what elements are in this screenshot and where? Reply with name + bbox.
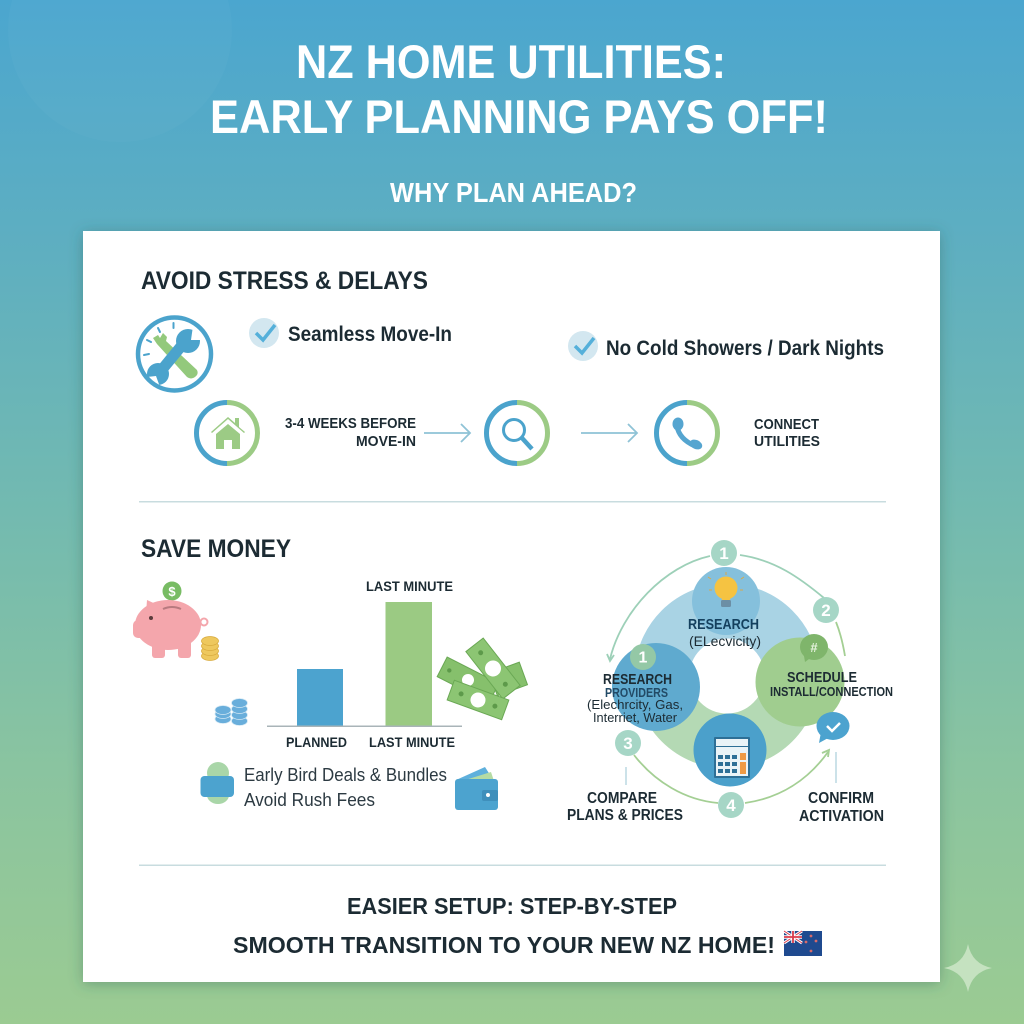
icon: blue coin stacks — [215, 698, 248, 726]
icon: piggy bank — [133, 582, 208, 658]
icon: new zealand flag — [784, 931, 822, 956]
savings text: Early Bird Deals & Bundles — [244, 764, 447, 785]
node: research providers: Interriet, Water — [593, 710, 678, 725]
step text: 3-4 weeks before move-in — [285, 415, 416, 450]
check item: no cold showers: No Cold Showers / Dark Nights — [606, 337, 884, 360]
label: confirm activation: CONFIRM — [808, 790, 874, 807]
node: research providers: 1 — [639, 650, 648, 666]
bar value label: LAST MINUTE — [366, 578, 453, 594]
closing text: SMOOTH TRANSITION TO YOUR NEW NZ HOME! — [233, 932, 775, 958]
icon: house in ring — [196, 402, 258, 464]
label: compare plans and prices — [567, 790, 683, 824]
decorative sparkle — [944, 944, 992, 992]
node: research providers: (Elechrcity, Gas, — [587, 697, 683, 712]
step text: 3-4 weeks before move-in: MOVE-IN — [356, 433, 416, 450]
title: EARLY PLANNING PAYS OFF! — [210, 90, 828, 143]
outer arrows — [607, 555, 845, 803]
node: schedule: SCHEDULE — [787, 669, 857, 686]
label: compare plans and prices: PLANS & PRICES — [567, 807, 683, 824]
step number 3 — [615, 730, 641, 756]
step text: connect utilities: UTILITIES — [754, 433, 820, 450]
icon: crossed tools — [138, 318, 211, 390]
step text: 3-4 weeks before move-in: 3-4 WEEKS BEFORE — [285, 415, 416, 432]
node: schedule: INSTALL/CONNECTION — [770, 685, 893, 699]
axis — [267, 726, 462, 727]
icon: gold coin stack — [202, 636, 218, 660]
icon: wallet right — [455, 767, 498, 810]
ring — [662, 611, 792, 741]
savings text — [244, 764, 447, 810]
icon: magnifier in ring — [486, 402, 548, 464]
node: research electricity — [688, 567, 761, 649]
icon: check speech bubble — [816, 712, 850, 743]
label: compare plans and prices: COMPARE — [587, 790, 657, 807]
node: schedule: # — [810, 640, 818, 655]
closing text — [233, 893, 775, 958]
node: research providers: RESEARCH — [603, 672, 672, 688]
icon: piggy bank: $ — [168, 584, 176, 599]
bar: planned — [297, 669, 343, 726]
node: schedule — [756, 634, 893, 726]
icon: calculator node — [694, 714, 766, 786]
subtitle: WHY PLAN AHEAD? — [390, 177, 637, 208]
axis labels — [286, 734, 455, 750]
arrow — [424, 424, 470, 442]
step number 1: 1 — [719, 544, 729, 563]
arrow — [581, 424, 637, 442]
step text: connect utilities: CONNECT — [754, 416, 819, 433]
icon: wallet left — [200, 762, 234, 804]
title: NZ HOME UTILITIES: — [296, 35, 726, 88]
connector lines — [626, 752, 836, 785]
icon: banknotes — [437, 638, 527, 720]
savings text: Avoid Rush Fees — [244, 789, 375, 810]
axis labels: PLANNED — [286, 734, 347, 750]
check item: seamless move-in — [249, 318, 452, 348]
label: confirm activation: ACTIVATION — [799, 808, 884, 825]
heading: avoid stress and delays: AVOID STRESS & DELAYS — [141, 267, 428, 295]
cycle diagram — [567, 540, 893, 825]
step number 4: 4 — [726, 796, 736, 815]
node: research providers: PROVIDERS — [605, 686, 668, 700]
axis labels: LAST MINUTE — [369, 734, 455, 750]
node: research electricity: RESEARCH — [688, 616, 759, 633]
closing text: EASIER SETUP: STEP-BY-STEP — [347, 893, 677, 919]
step number 2: 2 — [821, 601, 831, 620]
bar: last minute — [386, 602, 432, 726]
check item: no cold showers — [568, 331, 884, 361]
check item: seamless move-in: Seamless Move-In — [288, 323, 452, 346]
node: research electricity: (ELecvicity) — [689, 633, 761, 649]
heading: save money: SAVE MONEY — [141, 535, 291, 563]
step number 4 — [718, 792, 744, 818]
step number 3: 3 — [623, 734, 633, 753]
title — [210, 35, 828, 143]
panel: main card — [83, 231, 940, 982]
step number 1 — [711, 540, 737, 566]
label: confirm activation — [799, 790, 884, 825]
icon: phone in ring — [656, 402, 718, 464]
node: research providers — [587, 643, 700, 731]
step number 2 — [813, 597, 839, 623]
step text: connect utilities — [754, 416, 820, 450]
bar chart — [267, 578, 462, 750]
